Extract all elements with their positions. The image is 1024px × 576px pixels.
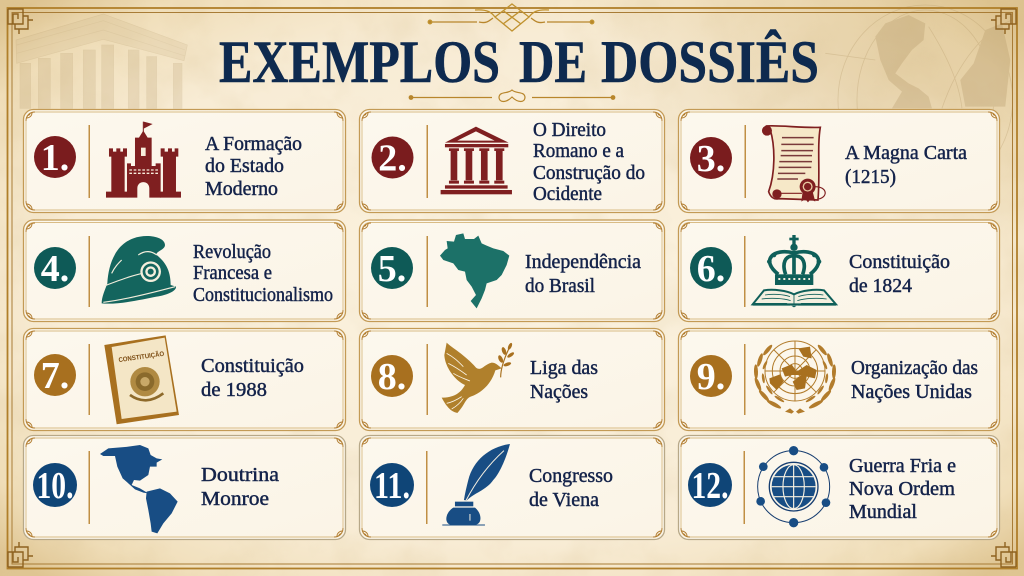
panel: card 1 [24, 110, 346, 212]
top ornament [428, 4, 594, 31]
label 11: de Viena [529, 490, 599, 511]
icon: temple [441, 127, 512, 194]
label 5: Independência [525, 252, 641, 273]
badge 7 [34, 354, 76, 397]
label 3: A Magna Carta [845, 143, 967, 164]
label 4: Constitucionalismo [193, 285, 333, 306]
icon: Phrygian cap [102, 236, 176, 304]
panel: card 11 [360, 436, 664, 540]
icon: UN emblem [753, 341, 837, 414]
label 2: Construção do [533, 163, 645, 184]
label 1 [205, 134, 302, 200]
title: DOSSIÊS [601, 29, 819, 95]
label 11 [529, 466, 613, 511]
background engraving: Greek temple [16, 14, 187, 108]
label 10: Doutrina [201, 465, 279, 486]
badge 12: 12. [692, 465, 728, 507]
label 1: A Formação [205, 134, 302, 155]
badge 7: 7. [41, 355, 69, 397]
label 3 [845, 143, 967, 188]
label 12 [849, 456, 956, 523]
label 2: Ocidente [533, 184, 602, 205]
icon: map of Brazil [440, 233, 509, 308]
title underline ornament [409, 90, 615, 102]
title: DE [519, 29, 587, 95]
badge 8 [371, 355, 413, 398]
background engraving: world map [825, 5, 1013, 195]
label 8 [530, 358, 598, 403]
label 11: Congresso [529, 466, 613, 487]
badge 1: 1. [41, 137, 69, 179]
title: EXEMPLOS [219, 29, 500, 95]
label 5: do Brasil [525, 276, 596, 297]
panel: card 7 [24, 328, 346, 430]
icon: castle [106, 122, 181, 198]
icon: scroll [762, 126, 825, 202]
label 7: Constituição [201, 356, 304, 377]
panel: card 12 [678, 436, 1000, 540]
label 2 [533, 120, 645, 205]
panel: card 4 [24, 220, 346, 322]
panel: card 9 [678, 328, 1000, 430]
label 12: Mundial [849, 502, 918, 523]
badge 2: 2. [378, 138, 407, 180]
panel: card 2 [360, 110, 664, 212]
label 7: de 1988 [201, 380, 267, 401]
label 2: O Direito [533, 120, 606, 141]
badge 2 [372, 136, 414, 180]
label 6: Constituição [849, 252, 950, 273]
label 12: Nova Ordem [849, 479, 955, 500]
panel: card 6 [678, 220, 1000, 322]
badge 1 [34, 136, 76, 179]
badge 10: 10. [36, 465, 74, 507]
label 4: Revolução [193, 242, 271, 263]
label 8: Nações [530, 382, 588, 403]
icon: map of the Americas [100, 445, 178, 533]
label 7 [201, 356, 304, 401]
label 10: Monroe [201, 489, 269, 510]
icon: constitution book [104, 335, 179, 424]
icon: dove with olive branch [442, 342, 515, 413]
badge 4 [34, 247, 76, 290]
badge 5 [371, 247, 413, 290]
panel: card 8 [360, 328, 664, 430]
badge 4: 4. [41, 248, 69, 290]
icon: globe network [756, 446, 830, 527]
label 2: Romano e a [533, 141, 624, 162]
badge 3: 3. [697, 138, 725, 180]
panel: card 10 [24, 436, 346, 540]
badge 5: 5. [378, 248, 406, 290]
label 1: Moderno [205, 179, 278, 200]
icon: quill and inkwell [442, 444, 510, 525]
label 9: Nações Unidas [851, 382, 972, 403]
label 9 [851, 358, 978, 403]
badge 9: 9. [697, 356, 725, 398]
label 8: Liga das [530, 358, 598, 379]
label 6: de 1824 [849, 276, 912, 297]
badge 3 [690, 137, 732, 180]
label 6 [849, 252, 950, 297]
badge 8: 8. [378, 356, 406, 398]
label 9: Organização das [851, 358, 978, 379]
label 3: (1215) [845, 167, 896, 188]
panel: card 5 [360, 220, 664, 322]
label 10 [201, 465, 279, 510]
label 4: Francesa e [193, 263, 272, 284]
badge 6 [690, 247, 732, 290]
icon: crown on open book [753, 235, 836, 307]
badge 11: 11. [374, 465, 410, 507]
icon: constitution book: CONSTITUIÇÃO [118, 349, 165, 364]
label 4 [193, 242, 333, 306]
badge 9 [690, 355, 732, 398]
label 12: Guerra Fria e [849, 456, 956, 477]
panel: card 3 [678, 110, 1000, 212]
label 5 [525, 252, 641, 297]
label 1: do Estado [205, 156, 284, 177]
title [219, 29, 819, 95]
badge 6: 6. [697, 248, 725, 290]
